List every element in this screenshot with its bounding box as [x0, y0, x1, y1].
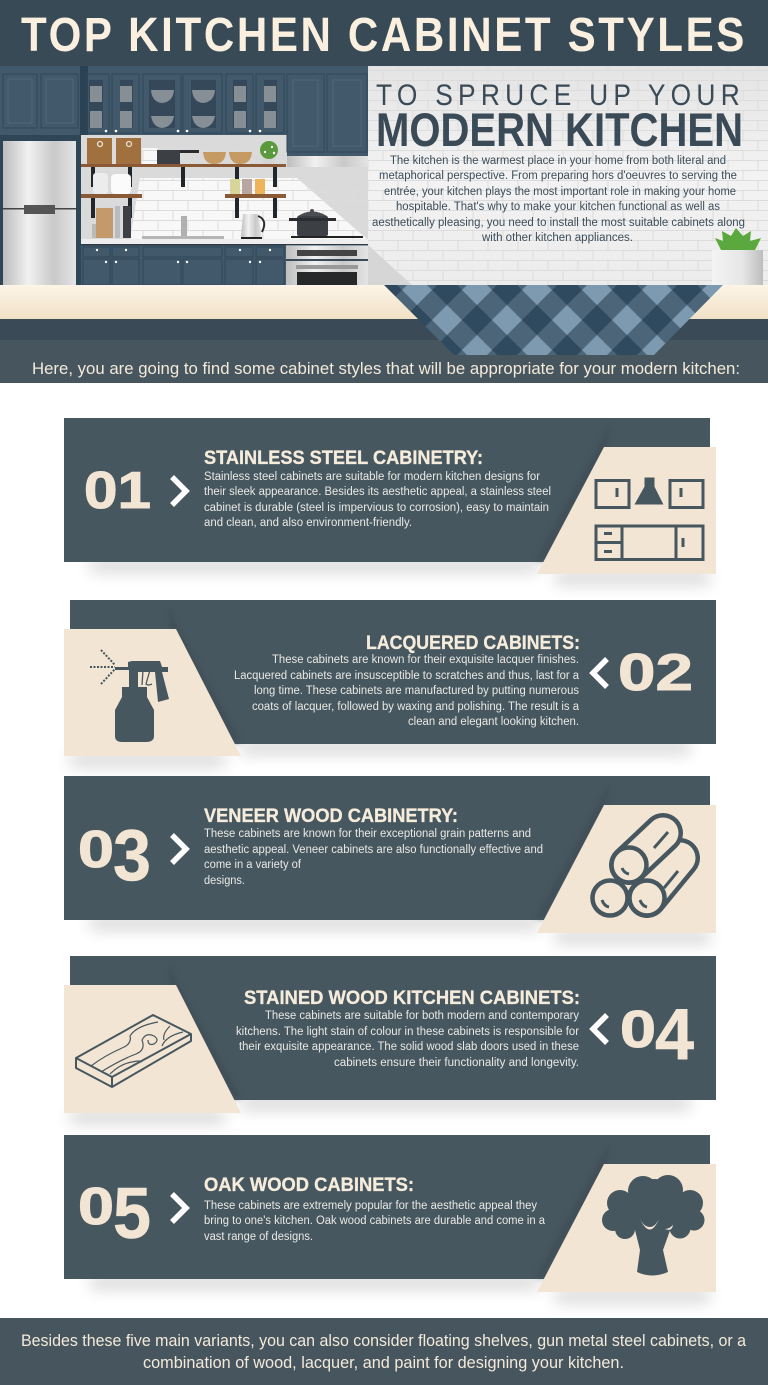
- kitchen illustration: [0, 66, 768, 286]
- chevron: [172, 477, 186, 505]
- subheading: Here, you are going to find some cabinet styles that will be appropriate for your modern kitchen:: [32, 359, 740, 378]
- number 03: 0: [78, 821, 114, 879]
- number 03: [78, 816, 151, 896]
- oven: [286, 246, 368, 285]
- icon: logs: [592, 832, 680, 916]
- lower cabinets: [81, 239, 368, 285]
- body text: [234, 654, 580, 728]
- intro paragraph: metaphorical perspective. From preparing hors d'oeuvres to serving the: [379, 170, 737, 182]
- body text: designs.: [204, 875, 245, 887]
- footer text: combination of wood, lacquer, and paint for designing your kitchen.: [143, 1353, 624, 1372]
- countertop and lower band: [0, 285, 768, 383]
- upper cabinets: [0, 66, 368, 156]
- number 04: [620, 995, 694, 1075]
- body text: [236, 1010, 579, 1069]
- chevron: [593, 1015, 607, 1043]
- footer text: [21, 1331, 747, 1372]
- body text: their sleek appearance. Besides its aesthetic appeal, a stainless steel: [204, 486, 551, 498]
- body text: These cabinets are known for their exceptional grain patterns and: [204, 828, 531, 840]
- intro heading: [376, 79, 745, 156]
- icon: tree: [602, 1175, 704, 1276]
- chevron: [172, 1194, 186, 1222]
- refrigerator: [0, 135, 81, 285]
- heading: VENEER WOOD CABINETRY:: [204, 805, 458, 827]
- panel: stained wood: [64, 956, 716, 1123]
- body text: cabinets ensure their functionality and longevity.: [334, 1057, 579, 1069]
- body text: long time. These cabinets are manufactured by putting numerous: [254, 685, 579, 697]
- body text: These cabinets are known for their exquisite lacquer finishes.: [272, 654, 579, 666]
- range hood: [287, 156, 368, 167]
- panel: stainless steel: [64, 418, 716, 584]
- heading: STAINED WOOD KITCHEN CABINETS:: [244, 987, 580, 1009]
- number 03: 3: [113, 816, 151, 896]
- counter appliances: [142, 209, 363, 239]
- body text: their exquisite appearance. The solid wood slab doors used in these: [239, 1041, 579, 1053]
- number 05: [78, 1174, 151, 1254]
- body text: clean and elegant looking kitchen.: [408, 716, 579, 728]
- heading: OAK WOOD CABINETS:: [204, 1174, 414, 1196]
- body text: vast range of designs.: [204, 1231, 313, 1243]
- body text: Lacquered cabinets are insusceptible to scratches and thus, last for a: [234, 670, 580, 682]
- body text: [204, 828, 543, 887]
- brick wall panel: [368, 66, 768, 286]
- backsplash: [81, 135, 368, 241]
- glass cabinet doors with bowls: [89, 80, 277, 132]
- icon: wood plank: [76, 1015, 191, 1087]
- number 02: 02: [618, 644, 693, 702]
- heading: LACQUERED CABINETS:: [366, 632, 580, 654]
- body text: bring to one's kitchen. Oak wood cabinets are durable and come in a: [204, 1215, 546, 1227]
- body text: [204, 471, 551, 529]
- icon: kitchen cabinets: [596, 479, 703, 560]
- body text: aesthetic appeal. Veneer cabinets are also functionally effective and: [204, 844, 543, 856]
- intro paragraph: hospitable. That's why to make your kitchen functional as well as: [396, 201, 720, 213]
- number 04: 0: [620, 1001, 656, 1059]
- plaid tablecloth: [384, 285, 723, 355]
- shelf items: [87, 138, 278, 238]
- body text: coats of lacquer, followed by waxing and polishing. The result is a: [252, 701, 580, 713]
- footer band: [0, 1318, 768, 1385]
- heading: STAINLESS STEEL CABINETRY:: [204, 447, 483, 469]
- body text: These cabinets are extremely popular for the aesthetic appeal they: [204, 1200, 537, 1212]
- body text: These cabinets are suitable for both modern and contemporary: [265, 1010, 579, 1022]
- body text: [204, 1200, 546, 1243]
- intro paragraph: aesthetically pleasing, you need to install the most suitable cabinets along: [372, 217, 745, 229]
- number 01: 01: [84, 462, 151, 520]
- panel: veneer wood: [64, 776, 716, 943]
- panel: lacquered: [64, 600, 716, 766]
- number 05: 5: [113, 1174, 151, 1254]
- shelves and brackets: [81, 164, 286, 218]
- icon: spray gun: [90, 650, 169, 742]
- number 04: 4: [655, 995, 694, 1075]
- intro paragraph: The kitchen is the warmest place in your home from both literal and: [390, 155, 726, 167]
- body text: cabinet is durable (steel is impervious to corrosion), easy to maintain: [204, 502, 549, 514]
- body text: and clean, and also environment-friendly.: [204, 517, 412, 529]
- potted plant: [712, 228, 763, 285]
- body text: kitchens. The light stain of colour in these cabinets is responsible for: [236, 1026, 579, 1038]
- title banner: [0, 0, 768, 66]
- intro paragraph: with other kitchen appliances.: [481, 232, 633, 244]
- panel: oak wood: [64, 1135, 716, 1302]
- number 05: 0: [78, 1178, 114, 1236]
- intro paragraph: [372, 155, 745, 244]
- chevron: [172, 835, 186, 863]
- body text: Stainless steel cabinets are suitable for modern kitchen designs for: [204, 471, 540, 483]
- intro paragraph: entrée, your kitchen plays the most important role in making your home: [384, 186, 736, 198]
- chevron: [593, 659, 607, 687]
- body text: come in a variety of: [204, 859, 302, 871]
